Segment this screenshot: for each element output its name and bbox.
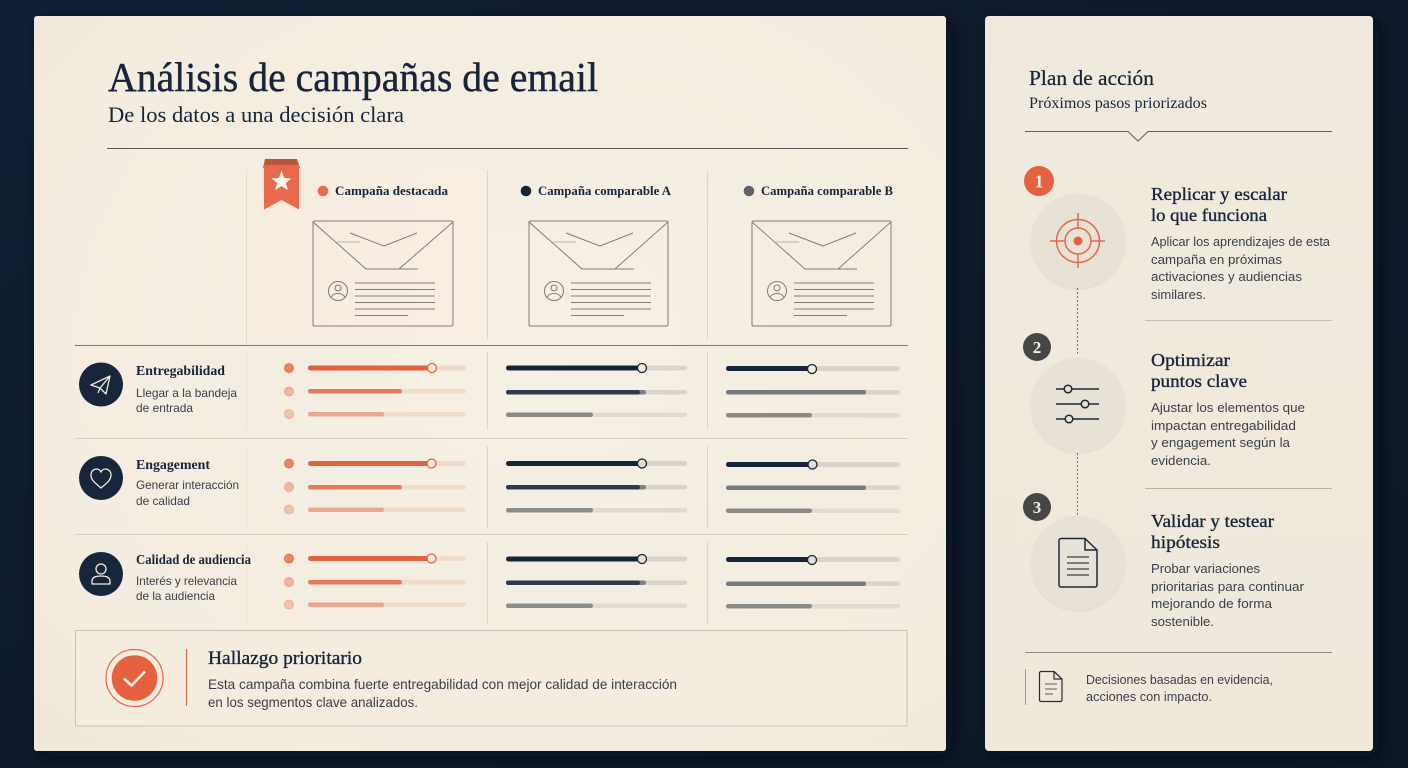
icon: envelope comparable A bbox=[529, 221, 668, 326]
footer note: Decisiones basadas en evidencia, bbox=[1086, 673, 1273, 687]
row label: Entregabilidad: Llegar a la bandeja bbox=[136, 386, 237, 400]
bars: Engagement A bbox=[506, 459, 687, 512]
callout: key finding bbox=[76, 630, 907, 726]
badge 2: 2 bbox=[1033, 338, 1041, 357]
column header: Campaña comparable A: Campaña comparable A bbox=[538, 183, 672, 198]
icon: check badge bbox=[106, 650, 163, 706]
icon: small document bbox=[1040, 672, 1062, 702]
bars: Engagement featured bbox=[284, 459, 466, 514]
highlighted column background bbox=[246, 170, 487, 345]
step 3: prioritarias para continuar bbox=[1151, 579, 1305, 594]
callout: key finding: Esta campaña combina fuerte entregabilidad con mejor calidad de interacción bbox=[208, 676, 677, 692]
icon: envelope comparable B bbox=[752, 221, 891, 326]
icon: target bbox=[1031, 194, 1125, 288]
bars: Calidad featured bbox=[284, 554, 466, 609]
badge 2 bbox=[1023, 333, 1051, 361]
step 3 bbox=[1023, 493, 1305, 629]
title: Análisis de campañas de email bbox=[108, 54, 598, 100]
panel: action plan bbox=[985, 16, 1373, 751]
step 2: puntos clave bbox=[1151, 371, 1247, 391]
column header: Campaña destacada: Campaña destacada bbox=[335, 183, 448, 198]
row label: Entregabilidad: de entrada bbox=[136, 401, 193, 415]
step 2: Ajustar los elementos que bbox=[1151, 400, 1305, 415]
heading: Plan de acción: Plan de acción bbox=[1029, 66, 1155, 90]
row label: Engagement: Generar interacción bbox=[136, 478, 239, 492]
row label: Entregabilidad bbox=[79, 362, 237, 415]
subheading: Próximos pasos priorizados bbox=[1029, 95, 1207, 112]
bars: Engagement B bbox=[726, 460, 900, 513]
badge 1 bbox=[1024, 166, 1054, 196]
step 1 bbox=[1024, 166, 1331, 302]
step 1: Replicar y escalar bbox=[1151, 184, 1287, 204]
row label: Calidad de audiencia: Interés y relevancia bbox=[136, 574, 237, 588]
step 1: campaña en próximas bbox=[1151, 252, 1283, 267]
row label: Engagement bbox=[79, 456, 239, 508]
step 2: Optimizar bbox=[1151, 350, 1230, 370]
step 1: activaciones y audiencias bbox=[1151, 269, 1303, 284]
bars: Entregabilidad featured bbox=[284, 364, 466, 418]
step 1: Aplicar los aprendizajes de esta bbox=[1151, 234, 1331, 249]
bars: Calidad B bbox=[726, 556, 900, 608]
row label: Calidad de audiencia bbox=[79, 552, 251, 603]
icon: paper plane bbox=[79, 362, 123, 406]
row label: Entregabilidad: Entregabilidad bbox=[136, 364, 225, 379]
step 3: Probar variaciones bbox=[1151, 561, 1260, 576]
subtitle: De los datos a una decisión clara bbox=[108, 102, 404, 127]
step 3: mejorando de forma bbox=[1151, 596, 1273, 611]
bars: Entregabilidad A bbox=[506, 364, 687, 417]
badge 3 bbox=[1023, 493, 1051, 521]
panel: campaign analysis bbox=[34, 16, 946, 751]
icon: heart bbox=[79, 456, 123, 500]
row label: Calidad de audiencia: de la audiencia bbox=[136, 589, 215, 603]
step 1: lo que funciona bbox=[1151, 205, 1267, 225]
callout: key finding: en los segmentos clave analizados. bbox=[208, 694, 418, 710]
step 3: sostenible. bbox=[1151, 614, 1214, 629]
row label: Calidad de audiencia: Calidad de audiencia bbox=[136, 553, 251, 568]
icon: ribbon bookmark bbox=[263, 159, 300, 210]
step 2 bbox=[1023, 333, 1305, 468]
badge 3: 3 bbox=[1033, 498, 1041, 517]
bars: Entregabilidad B bbox=[726, 364, 900, 418]
step 2: evidencia. bbox=[1151, 453, 1211, 468]
step 1: similares. bbox=[1151, 287, 1206, 302]
badge 1: 1 bbox=[1034, 172, 1044, 192]
callout: key finding: Hallazgo prioritario bbox=[208, 649, 362, 669]
column header: Campaña comparable B: Campaña comparable B bbox=[761, 183, 893, 198]
step 3: Validar y testear bbox=[1151, 511, 1274, 531]
row label: Engagement: Engagement bbox=[136, 458, 210, 473]
footer note bbox=[1026, 669, 1273, 705]
icon: sliders bbox=[1031, 358, 1125, 452]
step 2: impactan entregabilidad bbox=[1151, 418, 1296, 433]
bars: Calidad A bbox=[506, 554, 687, 608]
icon: document bbox=[1031, 516, 1125, 610]
icon: person bbox=[79, 552, 123, 596]
footer note: acciones con impacto. bbox=[1086, 690, 1212, 704]
icon: envelope featured bbox=[313, 221, 453, 326]
step 3: hipótesis bbox=[1151, 532, 1220, 552]
row label: Engagement: de calidad bbox=[136, 494, 190, 508]
step 2: y engagement según la bbox=[1151, 435, 1291, 450]
